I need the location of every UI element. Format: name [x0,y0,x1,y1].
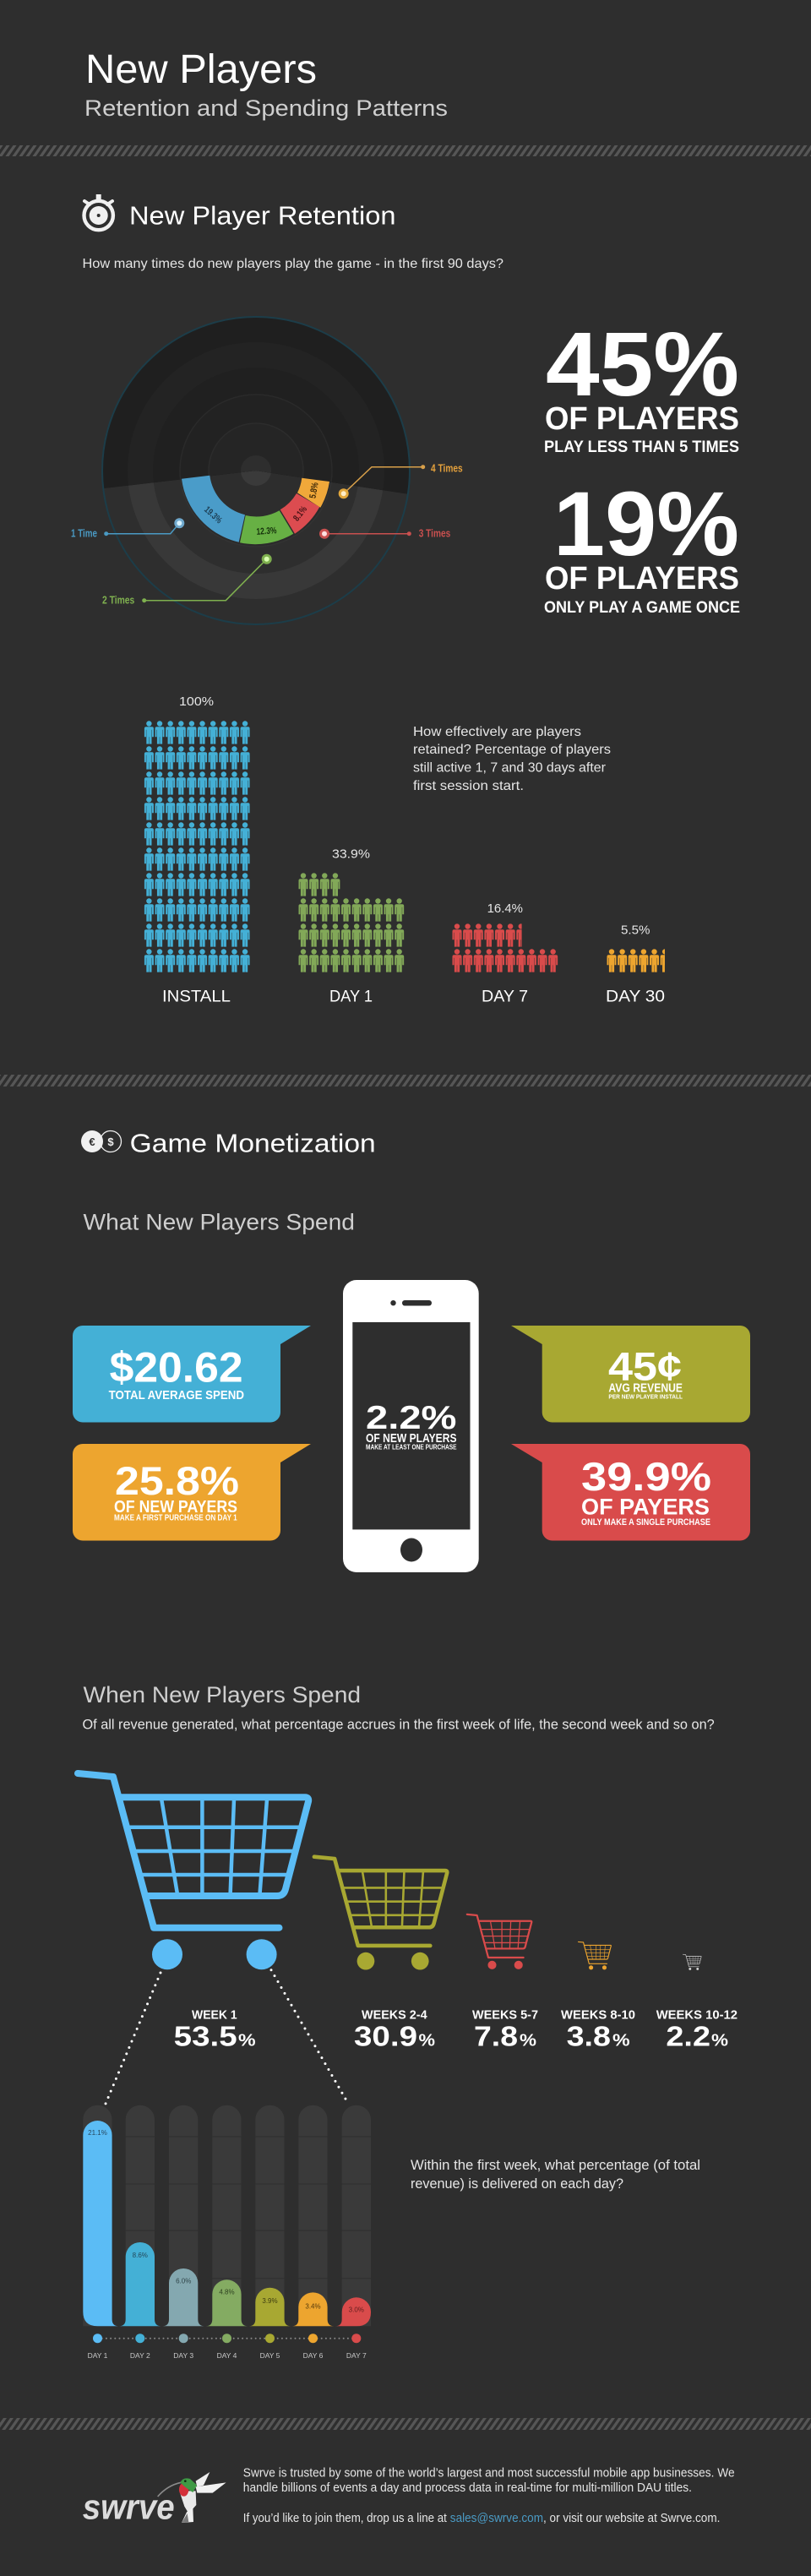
text: retention explanation: retained? Percentage of players [413,743,611,757]
text: about swrve: Swrve is trusted by some of the world’s largest and most successful mobile app businesses. We [243,2466,735,2481]
question: revenue accrual: Of all revenue generated, what percentage accrues in the first week of life, the second week and so on? [83,1717,715,1733]
text: retention explanation: How effectively are players [413,725,581,739]
callout: single purchase [511,1444,750,1541]
label: weeks 8-10: % [612,2032,630,2050]
icon: cart weeks 8-10 [579,1942,611,1969]
label: weeks 10-12: 2.2 [666,2021,710,2052]
icon: coins: $ [107,1136,114,1148]
phone: MAKE AT LEAST ONE PURCHASE [366,1443,457,1451]
text: retention explanation: first session start. [413,779,524,793]
radial chart: play frequency [102,317,410,624]
label: weeks 10-12 [656,2007,738,2052]
pictogram: day 7 16.4% [453,901,558,1006]
label: weeks 8-10: WEEKS 8-10 [561,2007,635,2022]
text: first week question: Within the first week, what percentage (of total [411,2158,700,2173]
timeline: day markers: DAY 3 [173,2351,193,2360]
stat: 19 percent: ONLY PLAY A GAME ONCE [544,599,740,617]
label: weeks 10-12: WEEKS 10-12 [656,2007,738,2022]
stat: 19 percent: OF PLAYERS [545,561,739,596]
bar: day 6 [292,2292,334,2326]
callout: first purchase on day 1: 25.8% [115,1458,239,1503]
segment: 2 times: 12.3% [256,526,277,537]
timeline: day markers: DAY 7 [346,2351,367,2360]
label: weeks 8-10: 3.8 [567,2021,611,2052]
callout: average revenue: PER NEW PLAYER INSTALL [608,1394,683,1400]
segment: 4 times: 5.8% [308,482,321,499]
icon: cart weeks 10-12 [683,1954,701,1970]
callout: total average spend: TOTAL AVERAGE SPEND [109,1389,244,1402]
callout: total average spend [73,1326,311,1423]
label: weeks 2-4: 30.9 [354,2021,417,2052]
callout: average revenue: AVG REVENUE [608,1381,683,1396]
text: about swrve: sales@swrve.com [450,2511,543,2525]
timeline: day markers: DAY 6 [303,2351,324,2360]
bar: day 4: 4.8% [219,2289,235,2296]
heading: game monetization: Game Monetization [130,1129,376,1158]
callout: average revenue: 45¢ [608,1344,682,1389]
callout: 4 times [339,461,463,498]
question text: How many times do new players play the game - in the first 90 days? [83,257,503,271]
phone: 2.2% [366,1400,456,1436]
pictogram: day 7 16.4%: 16.4% [487,901,523,916]
bar: day 6: 3.4% [305,2302,321,2310]
text: retention explanation [413,725,611,793]
label: weeks 8-10 [561,2007,635,2052]
bar: day 4 [206,2279,248,2326]
callout: first purchase on day 1 [73,1444,311,1541]
logo: swrve hummingbird: swrve [83,2487,175,2527]
icon: coins [81,1130,122,1152]
segment: 3 times [280,493,319,534]
callout: first purchase on day 1: MAKE A FIRST PURCHASE ON DAY 1 [114,1514,237,1523]
pictogram: day 1 33.9% [299,847,404,1006]
stat: 45 percent: 45% [546,313,739,415]
label: weeks 2-4: WEEKS 2-4 [362,2007,427,2022]
segment: 4 times [297,478,329,508]
callout: 4 times: 4 Times [431,461,463,474]
stat: 45 percent: OF PLAYERS [545,401,739,437]
pictogram: install 100%: 100% [179,694,214,709]
text: about swrve [243,2466,735,2525]
text: about swrve: handle billions of events a day and process data in real-time for multi-million DAU titles. [243,2481,692,2495]
stat: 45 percent [544,313,739,456]
label: week 1: % [238,2032,256,2050]
label: weeks 5-7 [472,2007,538,2052]
title: New Players [85,47,317,92]
bar: day 3 [162,2268,204,2326]
bar: day 7: 3.0% [349,2306,364,2314]
callout: 3 times: 3 Times [419,527,450,540]
subheading: when new players spend: When New Players Spend [83,1682,361,1707]
pictogram: install 100%: INSTALL [162,988,231,1006]
label: weeks 5-7: 7.8 [474,2021,518,2052]
subtitle: Retention and Spending Patterns [84,95,448,121]
timeline: day markers [88,2334,367,2360]
label: week 1: 53.5 [174,2021,237,2052]
callout: 2 times [102,554,272,606]
callout: 1 time [71,518,184,540]
timeline: day markers: DAY 5 [260,2351,280,2360]
label: weeks 5-7: WEEKS 5-7 [472,2007,538,2022]
text: first week question [411,2158,700,2192]
bar: day 5 [248,2288,291,2326]
label: weeks 2-4: % [419,2032,435,2050]
bar: day 2: 8.6% [133,2252,148,2259]
heading: new player retention: New Player Retention [129,201,395,231]
segment: 1 time: 19.3% [202,504,224,526]
text: first week question: revenue) is delivered on each day? [411,2176,623,2192]
text: about swrve: If you’d like to join them, drop us a line at [243,2511,448,2525]
phone [343,1280,479,1572]
callout: total average spend: $20.62 [110,1344,243,1391]
logo: swrve hummingbird [83,2472,226,2527]
icon: stopwatch [84,194,113,230]
timeline: day markers: DAY 2 [130,2351,150,2360]
bar: day 5: 3.9% [262,2297,278,2305]
stat: 19 percent [544,472,740,617]
label: weeks 5-7: % [520,2032,536,2050]
timeline: day markers: DAY 4 [217,2351,237,2360]
pictogram: day 30 5.5%: 5.5% [621,923,650,938]
segment: 3 times: 8.1% [291,504,309,523]
stat: 19 percent: 19% [553,472,739,575]
segment: 2 times [240,510,293,544]
text: about swrve: , or visit our website at Swrve.com. [543,2511,720,2525]
pictogram: day 30 5.5% [606,923,712,1006]
subheading: what new players spend: What New Players Spend [83,1210,355,1235]
callout: 2 times: 2 Times [102,593,134,606]
bar: day 7 [335,2297,371,2326]
text: retention explanation: still active 1, 7 and 30 days after [413,761,607,776]
label: weeks 2-4 [354,2007,435,2052]
icon: coins: € [89,1136,95,1148]
callout: single purchase: OF PAYERS [581,1495,710,1520]
callout: 3 times [319,527,450,540]
timeline: day markers: DAY 1 [88,2351,108,2360]
bar: day 1 [83,2121,118,2326]
stat: 45 percent: PLAY LESS THAN 5 TIMES [544,438,739,456]
label: week 1 [174,2007,256,2052]
pictogram: install 100% [144,694,250,1006]
icon: cart weeks 2-4 [314,1857,447,1970]
icon: large cart week 1 [78,1773,308,1969]
segment: 1 time [182,476,245,542]
bar: day 3: 6.0% [176,2277,191,2285]
bar: day 1: 21.1% [88,2129,107,2137]
label: week 1: WEEK 1 [192,2007,237,2022]
icon: cart weeks 5-7 [467,1914,531,1969]
callout: 1 time: 1 Time [71,527,97,540]
pictogram: day 30 5.5%: DAY 30 [606,988,665,1006]
bar: day 2 [119,2242,161,2326]
pictogram: day 7 16.4%: DAY 7 [482,988,528,1006]
label: weeks 10-12: % [711,2032,728,2050]
dotted connectors [105,1970,349,2105]
pictogram: day 1 33.9%: 33.9% [332,847,370,862]
pictogram: day 1 33.9%: DAY 1 [329,988,373,1006]
phone: OF NEW PLAYERS [366,1431,456,1446]
bar chart: first week daily revenue [80,2105,373,2326]
callout: average revenue [511,1326,750,1423]
callout: single purchase: ONLY MAKE A SINGLE PURCHASE [581,1517,710,1528]
callout: first purchase on day 1: OF NEW PAYERS [114,1498,237,1517]
callout: single purchase: 39.9% [581,1454,711,1499]
